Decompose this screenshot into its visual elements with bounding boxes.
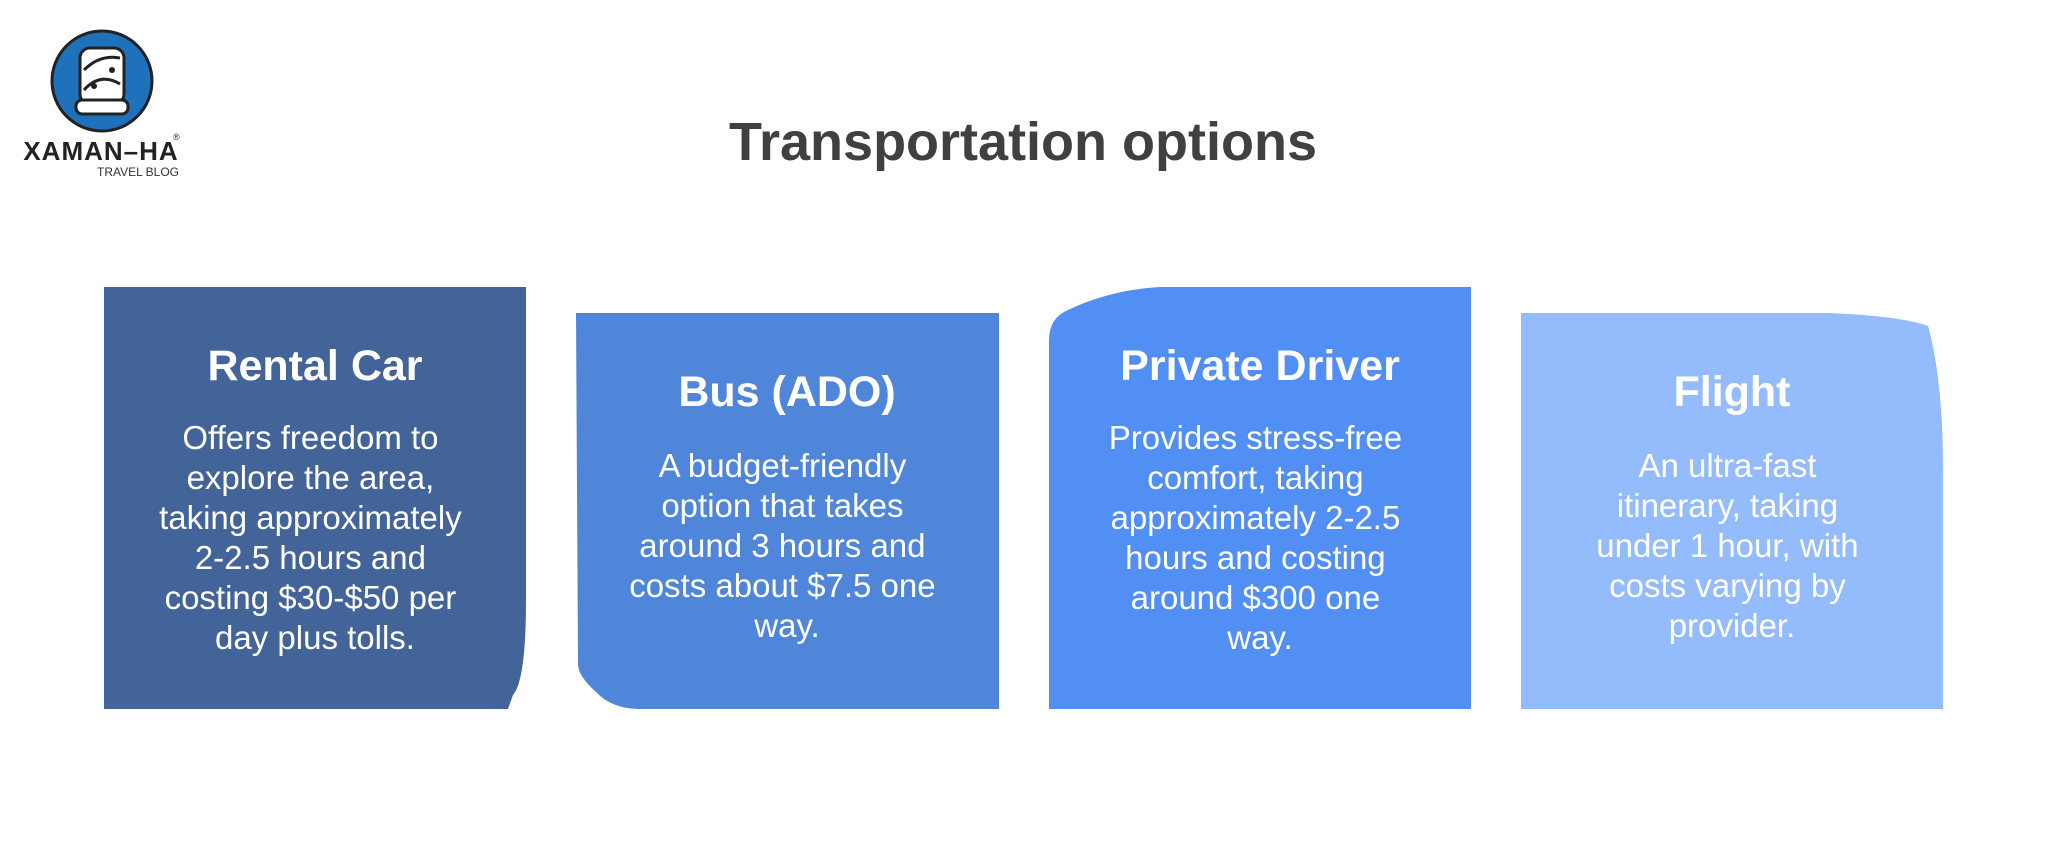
panel: private driver: around $300 one: [1131, 579, 1380, 616]
panel: private driver: comfort, taking: [1147, 459, 1364, 496]
panel: rental car: explore the area,: [187, 459, 434, 496]
panel: bus: [576, 313, 999, 709]
panel: bus: costs about $7.5 one: [629, 567, 936, 604]
panel: flight: under 1 hour, with: [1596, 527, 1859, 564]
panel: flight: costs varying by: [1609, 567, 1846, 604]
panel: rental car: taking approximately: [159, 499, 462, 536]
logo: TRAVEL BLOG: [97, 165, 179, 179]
panel: bus: way.: [753, 607, 820, 644]
panel: rental car: [104, 287, 526, 709]
panel: rental car: costing $30-$50 per: [165, 579, 456, 616]
panel: bus: around 3 hours and: [639, 527, 926, 564]
panel: private driver: hours and costing: [1125, 539, 1386, 576]
panel: rental car: Offers freedom to: [182, 419, 438, 456]
logo: XAMAN–HA: [23, 136, 179, 166]
panel: rental car: 2-2.5 hours and: [195, 539, 426, 576]
panel: flight: provider.: [1669, 607, 1795, 644]
panel: flight: itinerary, taking: [1617, 487, 1838, 524]
logo: [23, 31, 180, 179]
panel: rental car: day plus tolls.: [215, 619, 415, 656]
logo: ®: [173, 132, 180, 142]
panel: bus: option that takes: [661, 487, 904, 524]
panel: flight: Flight: [1673, 368, 1791, 416]
panel: bus: Bus (ADO): [678, 368, 896, 416]
panel: private driver: [1049, 287, 1471, 709]
panel: private driver: Provides stress-free: [1109, 419, 1402, 456]
panel: private driver: approximately 2-2.5: [1110, 499, 1400, 536]
panel: rental car: Rental Car: [207, 342, 423, 390]
panel: bus: A budget-friendly: [659, 447, 907, 484]
panel: flight: An ultra-fast: [1638, 447, 1816, 484]
title: Transportation options: [729, 112, 1317, 172]
panel: private driver: way.: [1226, 619, 1293, 656]
panel: flight: [1521, 313, 1943, 709]
panel: private driver: Private Driver: [1120, 342, 1400, 390]
